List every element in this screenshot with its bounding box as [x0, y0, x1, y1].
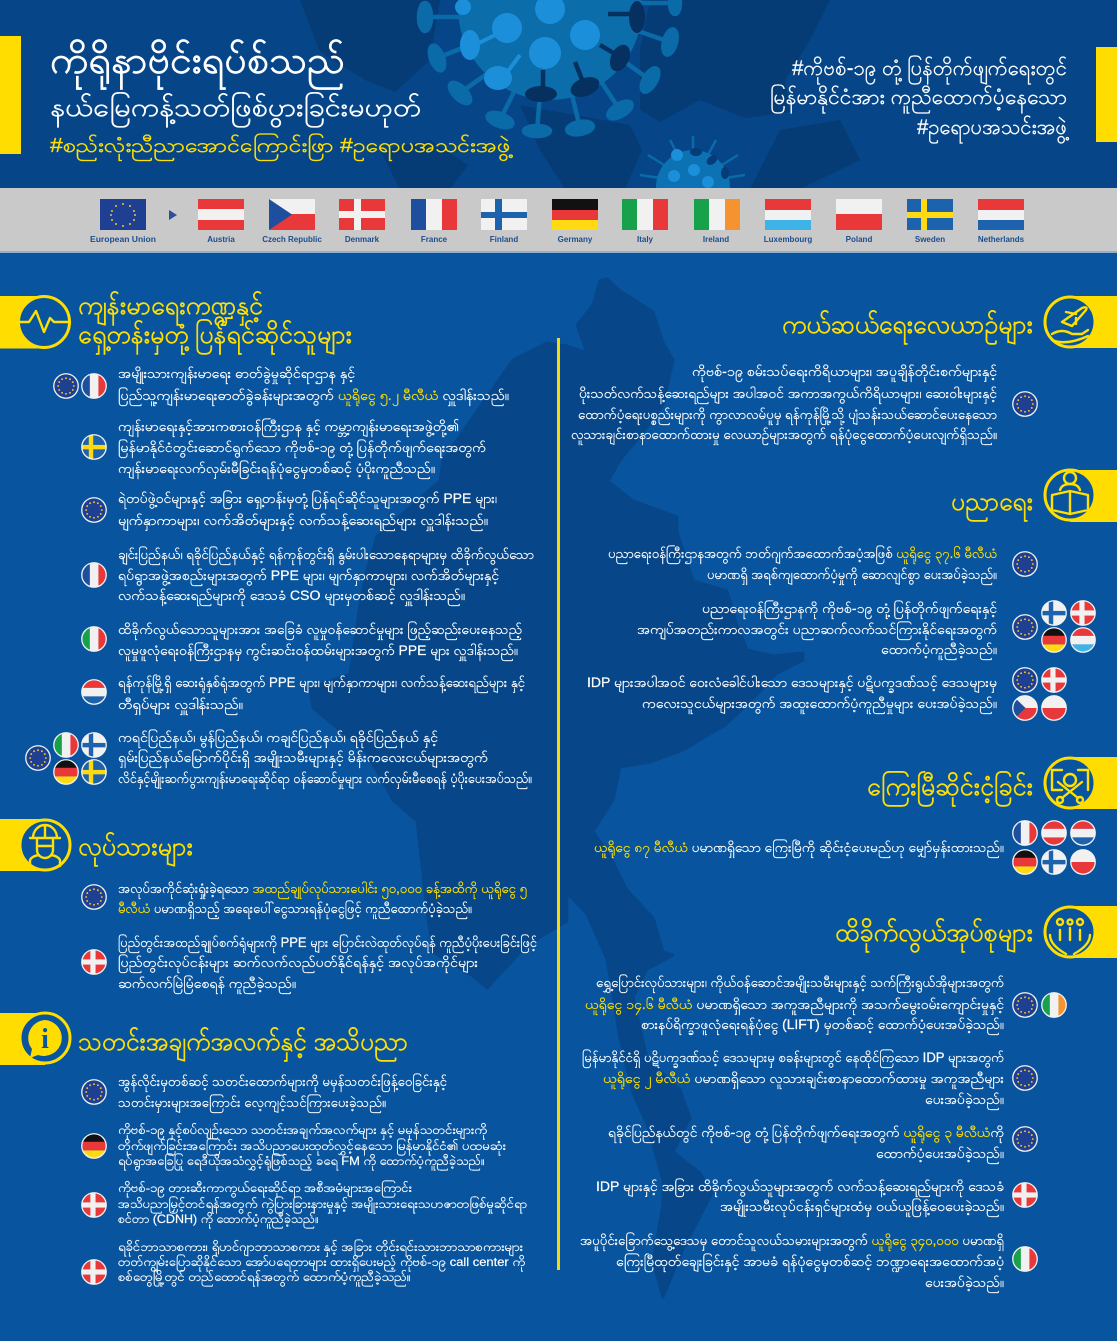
item: CDNH: အသိပညာမြှင့်တင်ရန်အတွက် ကွဲပြားခြားနားမှုနှင့် အမျိုးသားရေးသဟဇာတဖြစ်မှုဆိုင်ရာ [118, 1195, 527, 1214]
item: Rakhine: ထောက်ပံ့ပေးအပ်ခဲ့သည်။ [876, 1146, 1004, 1164]
item: learning continuity: အကျပ်အတည်းကာလအတွင်း ပညာဆက်လက်သင်ကြားနိုင်ရေးအတွက် [637, 621, 998, 640]
item: budget support [608, 545, 1037, 585]
item: IDP camps [582, 1049, 1037, 1110]
item: farmers: ပေးအပ်ခဲ့သည်။ [925, 1275, 1004, 1293]
item: community radio [81, 1122, 506, 1171]
panel: workers [0, 819, 537, 994]
item: garment workers [82, 881, 527, 919]
item: police PPE: ရဲတပ်ဖွဲ့ဝင်များနှင့် အခြား ရှေ့တန်းမှတုံ့ပြန်ရင်ဆိုင်သူများအတွက် PPE များ၊ [118, 490, 497, 509]
heading: health [0, 291, 352, 355]
item: laboratories: အမျိုးသားကျန်းမာရေး ဓာတ်ခွဲမှုဆိုင်ရာဌာန နှင့် [118, 366, 356, 384]
item: reproductive health: ရှမ်းပြည်နယ်မြောက်ပိုင်းရှိ အမျိုးသမီးများနှင့် မိန်းကလေးငယ်များအတွက် [118, 749, 489, 768]
item: police PPE [82, 490, 497, 531]
flag: Ireland: Ireland [703, 235, 729, 244]
item: WHO [81, 418, 487, 479]
flag: Finland: Finland [490, 235, 518, 244]
item: police PPE: မျက်နှာကာများ၊ လက်အိတ်များနှင့် လက်သန့်ဆေးရည်များ လှူဒါန်းသည်။ [118, 513, 488, 531]
item: Yangon hospitals: ရန်ကုန်မြို့ရှိ ဆေးရုံနှစ်ရုံအတွက် PPE များ၊ မျက်နှာကာများ၊ လက်သန့်ဆေးရည်များ နှင့် [118, 674, 525, 693]
item: Chin Rakhine CSO: ချင်းပြည်နယ်၊ ရခိုင်ပြည်နယ်နှင့် ရန်ကုန်တွင်းရှိ နွမ်းပါးသောနေရာများမှ ထိခိုက်လွယ်သော [118, 546, 534, 565]
item: CDNH: စင်တာ (CDNH) ကို ထောက်ပံ့ကူညီခဲ့သည်။ [118, 1211, 319, 1229]
item: humanitarian flights [571, 364, 1037, 445]
item: CDNH: ကိုဗစ်-၁၉ တားဆီးကာကွယ်ရေးဆိုင်ရာ အစီအမံများအကြောင်း [118, 1179, 412, 1198]
title: ကိုရိုနာဗိုင်းရပ်စ်သည် [50, 39, 345, 90]
item: humanitarian flights: ကိုဗစ်-၁၉ စမ်းသပ်ရေးကိရိယာများ၊ အပူချိန်တိုင်းစက်များနှင့် [692, 364, 998, 382]
item: journalist training: သတင်းမှားများအကြောင်း လေ့ကျင့်သင်ကြားပေးခဲ့သည်။ [118, 1094, 386, 1113]
flag: Poland [836, 199, 882, 244]
flag: Italy: Italy [637, 235, 654, 244]
column divider [557, 338, 560, 1270]
item: Rakhine: ရခိုင်ပြည်နယ်တွင် ကိုဗစ်-၁၉ တုံ့ပြန်တိုက်ဖျက်ရေးအတွက် ယူရိုငွေ ၃ မီလီယံကို [608, 1124, 1005, 1143]
header right text: #ကိုဗစ်-၁၉ တုံ့ပြန်တိုက်ဖျက်ရေးတွင် [792, 54, 1067, 86]
item: call center [81, 1238, 525, 1287]
heading: education: ပညာရေး [951, 488, 1033, 521]
item: budget support: ပမာဏရှိ အရစ်ကျထောက်ပံ့မှုကို ဆောလျင်စွာ ပေးအပ်ခဲ့သည်။ [707, 567, 997, 585]
large virus illustration [419, 0, 680, 136]
item: call center: စစ်တွေမြို့တွင် တည်ထောင်ရန်အတွက် ထောက်ပံ့ကူညီခဲ့သည်။ [118, 1268, 411, 1287]
flag: Sweden: Sweden [915, 235, 945, 244]
heading: vulnerable groups: ထိခိုက်လွယ်အုပ်စုများ [835, 918, 1033, 953]
title block [50, 39, 512, 161]
item: journalist training: အွန်လိုင်းမှတစ်ဆင့် သတင်းထောက်များကို မမှန်သတင်းဖြန့်ဝေခြင်းနှင့် [118, 1073, 447, 1092]
item: learning continuity [637, 600, 1096, 660]
flag: Netherlands: Netherlands [978, 235, 1025, 244]
item: WHO: ကျန်းမာရေးနှင့်အားကစားဝန်ကြီးဌာန နှင့် ကမ္ဘာ့ကျန်းမာရေးအဖွဲ့တို့၏ [118, 418, 460, 437]
panel: vulnerable groups [580, 906, 1117, 1293]
item: WHO: မြန်မာနိုင်ငံတွင်းဆောင်ရွက်သော ကိုဗစ်-၁၉ တုံ့ပြန်တိုက်ဖျက်ရေးအတွက် [118, 439, 487, 458]
flag: Austria: Austria [207, 235, 235, 244]
panel: transport flights [571, 296, 1117, 445]
item: humanitarian flights: လူသားချင်းစာနာထောက်ထားမှု လေယာဉ်များအတွက် ရန်ပုံငွေထောက်ပံ့ပေးလျက်ရှိသည်။ [571, 427, 997, 445]
heading: debt suspension: ကြေးမြီဆိုင်းငံ့ခြင်း [867, 771, 1033, 806]
item: Chin Rakhine CSO: ရပ်ရွာအဖွဲ့အစည်းများအတွက် PPE များ၊ မျက်နှာကာများ၊ လက်အိတ်များနှင့် [118, 568, 500, 586]
heading: information [0, 1013, 408, 1065]
item: laboratories: ပြည်သူ့ကျန်းမာရေးဓာတ်ခွဲခန်းများအတွက် ယူရိုငွေ ၅.၂ မီလီယံ လှူဒါန်းသည်။ [118, 387, 509, 406]
item: IDP camps: ယူရိုငွေ ၂ မီလီယံ ပမာဏရှိသော လူသားချင်းစာနာထောက်ထားမှု အကူအညီများ [603, 1071, 1005, 1089]
flag: Luxembourg [764, 199, 812, 244]
item: garment workers: အလုပ်အကိုင်ဆုံးရှုံးခဲ့ရသော အထည်ချုပ်လုပ်သားပေါင်း ၅၀,၀၀၀ ခန့်အထိကို ယူရိုငွေ ၅ [118, 881, 527, 899]
item: LIFT: စားနပ်ရိက္ခာဖူလုံရေးရန်ပုံငွေ (LIFT) မှတစ်ဆင့် ထောက်ပံ့ပေးအပ်ခဲ့သည်။ [641, 1017, 1004, 1035]
panel: news and information [0, 1013, 527, 1287]
header right text: မြန်မာနိုင်ငံအား ကူညီထောက်ပံ့နေသော [770, 83, 1067, 114]
heading: transport: ကယ်ဆယ်ရေးလေယာဉ်များ [782, 310, 1033, 344]
item: Rakhine [608, 1124, 1037, 1164]
item: journalist training [82, 1073, 447, 1113]
flag: Netherlands [978, 199, 1025, 244]
arrow [169, 210, 177, 220]
item: hand sanitiser from women entrepreneurs [596, 1178, 1038, 1217]
panel: education [587, 470, 1117, 721]
item: IDP camps: ပေးအပ်ခဲ့သည်။ [925, 1092, 1004, 1110]
item: farmers: အပူပိုင်းခြောက်သွေ့ဒေသမှ တောင်သူလယ်သမားများအတွက် ယူရိုငွေ ၃၄၀,၀၀၀ ပမာဏရှိ [580, 1232, 1004, 1251]
item: call center: ရခိုင်ဘာသာစကား၊ ရိုဟင်ဂျာဘာသာစကား နှင့် အခြား တိုင်းရင်းသားဘာသာစကားများ [118, 1238, 523, 1257]
right yellow accent bar [1096, 47, 1117, 142]
flag: Luxembourg: Luxembourg [764, 235, 812, 244]
heading: transport [782, 296, 1117, 348]
item: garment factories: ပြည်တွင်းလုပ်ငန်းများ ဆက်လက်လည်ပတ်နိုင်ရန်နှင့် အလုပ်အကိုင်များ [118, 954, 479, 973]
panel: debt suspension [594, 757, 1117, 875]
heading: vulnerable groups [835, 906, 1117, 958]
flag: European Union [90, 199, 156, 244]
item: LIFT: ရွှေ့ပြောင်းလုပ်သားများ၊ ကိုယ်ဝန်ဆောင်အမျိုးသမီးများနှင့် သက်ကြီးရွယ်အိုများအတွက် [596, 974, 1005, 993]
flag: France [411, 199, 457, 244]
item: Yangon hospitals [81, 674, 525, 715]
item: debt amount: ယူရိုငွေ ၈၇ မီလီယံ ပမာဏရှိသော ကြေးမြီကို ဆိုင်းငံ့ပေးမည်ဟု မျှော်မှန်းထားသည်။ [594, 839, 1004, 858]
heading: information: သတင်းအချက်အလက်နှင့် အသိပညာ [78, 1027, 408, 1062]
small virus illustration [640, 136, 745, 224]
item: garment workers: မီလီယံ ပမာဏရှိသည့် အရေးပေါ်ငွေသားရန်ပုံငွေဖြင့် ကူညီထောက်ပံ့ခဲ့သည်။ [118, 900, 472, 919]
flag: Ireland [694, 199, 740, 244]
flag: Sweden [907, 199, 953, 244]
item: garment factories: ဆက်လက်မြဲမြံစေရန် ကူညီခဲ့သည်။ [118, 975, 296, 994]
item: reproductive health [26, 729, 532, 789]
item: social welfare: လူမှုဖူလုံရေးဝန်ကြီးဌာနမှ ကွင်းဆင်းဝန်ထမ်းများအတွက် PPE များ လှူဒါန်းသည်။ [118, 642, 518, 661]
heading: health: ရှေ့တန်းမှတုံ့ပြန်ရင်ဆိုင်သူများ [78, 319, 352, 355]
heading: debt suspension [867, 757, 1117, 809]
item: WHO: ကျန်းမာရေးလက်လှမ်းမီခြင်းရန်ပုံငွေမှတစ်ဆင့် ပံ့ပိုးကူညီသည်။ [118, 460, 435, 479]
item: farmers: ကြေးမြီထုတ်ချေးခြင်းနှင့် အာမခံ ရန်ပုံငွေမှတစ်ဆင့် ဘဏ္ဍာရေးအထောက်အပံ့ [616, 1253, 1004, 1272]
header band [0, 0, 1117, 224]
item: LIFT [585, 974, 1067, 1035]
heading: information: i [41, 1024, 49, 1055]
flag: Germany: Germany [558, 235, 593, 244]
item: reproductive health: ကရင်ပြည်နယ်၊ မွန်ပြည်နယ်၊ ကချင်ပြည်နယ်၊ ရခိုင်ပြည်နယ် နှင့် [118, 729, 439, 748]
flag: France: France [421, 235, 448, 244]
item: community radio: ရပ်ရွာအခြေပြု ရေဒီယိုအသံလွှင့်ရုံဖြစ်သည့် ခရေ FM ကို ထောက်ပံ့ကူညီခဲ့သည်။ [118, 1152, 485, 1171]
item: community radio: ကိုဗစ်-၁၉ နှင့်စပ်လျဉ်းသော သတင်းအချက်အလက်များ နှင့် မမှန်သတင်းများကို [118, 1122, 487, 1140]
item: learning continuity: ပညာရေးဝန်ကြီးဌာနကို ကိုဗစ်-၁၉ တုံ့ပြန်တိုက်ဖျက်ရေးနှင့် [702, 600, 998, 619]
item: learning continuity: ထောက်ပံ့ကူညီခဲ့သည်။ [881, 642, 997, 660]
heading: health: ကျန်းမာရေးကဏ္ဍနှင့် [78, 291, 263, 326]
item: Chin Rakhine CSO [81, 546, 534, 606]
hashtag line: #စည်းလုံးညီညာအောင်ကြောင်းဖြာ #ဥရောပအသင်းအဖွဲ့ [50, 133, 512, 161]
item: hand sanitiser from women entrepreneurs: အမျိုးသမီးလုပ်ငန်းရှင်များထံမှ ဝယ်ယူဖြန့်ဝေပေးခဲ့သည်။ [720, 1198, 1004, 1217]
left yellow accent bar [0, 36, 21, 154]
item: Chin Rakhine CSO: လက်သန့်ဆေးရည်များကို ဒေသခံ CSO များမှတစ်ဆင့် လှူဒါန်းသည်။ [118, 588, 465, 606]
subtitle: နယ်မြေကန့်သတ်ဖြစ်ပွားခြင်းမဟုတ် [50, 90, 422, 128]
item: Yangon hospitals: တီရှပ်များ လှူဒါန်းသည်။ [118, 697, 243, 715]
item: garment factories [81, 934, 537, 994]
heading: workers: လုပ်သားများ [78, 832, 193, 866]
flag: Italy [622, 199, 668, 244]
header right text: #ဥရောပအသင်းအဖွဲ့ [917, 114, 1070, 145]
flag: Denmark [339, 199, 385, 244]
item: call center: တတ်ကျွမ်းပြောဆိုနိုင်သော အော်ပရေတာများ ထားရှိပေးမည့် ကိုဗစ်-၁၉ call center ကို [118, 1253, 525, 1273]
item: social welfare: ထိခိုက်လွယ်သောသူများအား အခြေခံ လူမှုဝန်ဆောင်မှုများ ဖြည့်ဆည်းပေးနေသည့် [118, 621, 522, 640]
heading: education [951, 470, 1117, 522]
world map shapes [300, 0, 860, 189]
item: community radio: တိုက်ဖျက်ခြင်းအကြောင်း အသိပညာပေးထုတ်လွှင့်နေသော မြန်မာနိုင်ငံ၏ ပထမဆုံး [118, 1137, 506, 1156]
item: garment factories: ပြည်တွင်းအထည်ချုပ်စက်ရုံများကို PPE များ ပြောင်းလဲထုတ်လုပ်ရန် ကူညီပံ့ပိုးပေးခြင်းဖြင့် [118, 934, 537, 953]
flag: Poland: Poland [846, 235, 872, 244]
item: children in remote areas: ကလေးသူငယ်များအတွက် အထူးထောက်ပံ့ကူညီမှုများ ပေးအပ်ခဲ့သည်။ [642, 696, 997, 714]
flag band [0, 188, 1117, 253]
item: budget support: ပညာရေးဝန်ကြီးဌာနအတွက် ဘတ်ဂျက်အထောက်အပံ့အဖြစ် ယူရိုငွေ ၃၇.၆ မီလီယံ [608, 545, 998, 564]
item: IDP camps: မြန်မာနိုင်ငံရှိ ပဋိပက္ခဒဏ်သင့် ဒေသများမှ စခန်းများတွင် နေထိုင်ကြသော IDP များအတွက် [582, 1049, 1005, 1068]
item: laboratories [54, 366, 509, 406]
item: hand sanitiser from women entrepreneurs: IDP များနှင့် အခြား ထိခိုက်လွယ်သူများအတွက် လက်သန့်ဆေးရည်များကို ဒေသခံ [596, 1178, 1004, 1197]
item: CDNH [81, 1179, 527, 1229]
flag: Czech Republic [262, 199, 322, 244]
item: debt amount [594, 820, 1096, 875]
flag: Czech Republic: Czech Republic [262, 235, 322, 244]
item: children in remote areas [587, 667, 1067, 721]
item: social welfare [81, 621, 522, 661]
item: LIFT: ယူရိုငွေ ၁၄.၆ မီလီယံ ပမာဏရှိသော အကူအညီများကို အသက်မွေးဝမ်းကျောင်းမှုနှင့် [585, 997, 1005, 1015]
flag: Denmark: Denmark [345, 235, 380, 244]
flag: Finland [481, 199, 527, 244]
header right text [770, 54, 1070, 145]
item: children in remote areas: IDP များအပါအဝင် ဝေးလံခေါင်ပါးသော ဒေသများနှင့် ပဋိပက္ခဒဏ်သင့် ဒေသများမှ [587, 675, 997, 693]
item: humanitarian flights: ပိုးသတ်လက်သန့်ဆေးရည်များ အပါအဝင် အကာအကွယ်ကိရိယာများ၊ ဆေးဝါးများနှင့် [579, 386, 998, 404]
heading: workers [0, 819, 193, 871]
flag: European Union: European Union [90, 235, 156, 244]
flag: Austria [198, 199, 244, 244]
item: farmers [580, 1232, 1038, 1293]
item: humanitarian flights: ထောက်ပံ့ရေးပစ္စည်းများကို ကွာလာလမ်ပူမှ ရန်ကုန်မြို့သို့ ပျံသန်းသယ်ဆောင်ပေးနေသော [578, 406, 997, 425]
flag: Germany [552, 199, 598, 244]
background map silhouette [310, 279, 803, 1297]
panel: health sector and frontline [0, 291, 534, 789]
item: reproductive health: လိင်နှင့်မျိုးဆက်ပွားကျန်းမာရေးဆိုင်ရာ ဝန်ဆောင်မှုများ လက်လှမ်းမီစေရန် ပံ့ပိုးပေးအပ်သည်။ [118, 771, 532, 789]
